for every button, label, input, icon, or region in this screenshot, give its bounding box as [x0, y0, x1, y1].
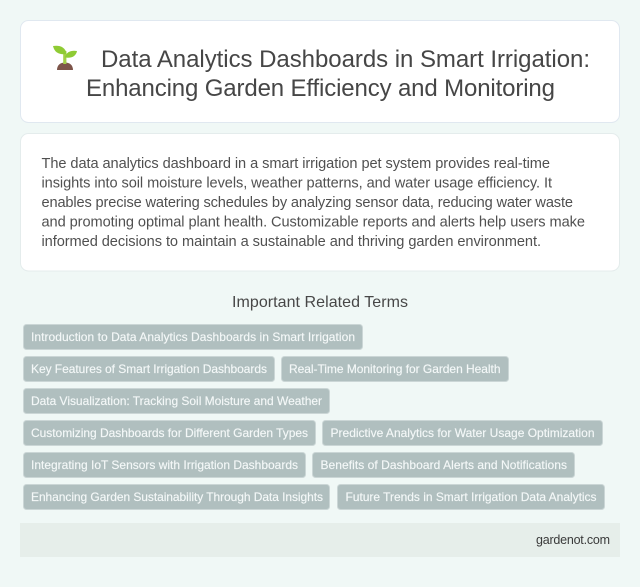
text block: description: The data analytics dashboard in a smart irrigation pet system provides real-time	[42, 156, 550, 172]
tag	[24, 420, 316, 446]
tag	[322, 420, 602, 446]
tag: Predictive Analytics for Water Usage Optimization	[330, 426, 594, 440]
tag: Key Features of Smart Irrigation Dashboards	[31, 362, 267, 376]
icon: seedling	[53, 46, 77, 70]
tag	[24, 452, 306, 478]
tag	[312, 452, 574, 478]
tag: Introduction to Data Analytics Dashboards in Smart Irrigation	[31, 330, 355, 344]
tag: Benefits of Dashboard Alerts and Notifications	[320, 458, 567, 472]
tag	[24, 356, 274, 382]
tag	[24, 484, 330, 510]
tag	[338, 484, 604, 510]
text block: description: and promoting optimal plant health. Customizable reports and alerts help users make	[42, 214, 585, 230]
panel: description card	[20, 134, 620, 271]
text block: description	[42, 156, 585, 250]
tag: Future Trends in Smart Irrigation Data Analytics	[346, 490, 596, 504]
title: Enhancing Garden Efficiency and Monitoring	[86, 75, 555, 102]
tag: Customizing Dashboards for Different Garden Types	[31, 426, 308, 440]
tag	[24, 324, 362, 350]
text block: description: informed decisions to maintain a sustainable and thriving garden environment.	[42, 234, 541, 250]
tag	[24, 388, 330, 414]
tag: Data Visualization: Tracking Soil Moisture and Weather	[31, 394, 322, 408]
text block: description: insights into soil moisture levels, weather patterns, and water usage efficiency. It	[42, 176, 552, 192]
title	[86, 46, 590, 102]
text block: description: enables precise watering schedules by analyzing sensor data, reducing water waste	[42, 195, 573, 211]
tag: Integrating IoT Sensors with Irrigation Dashboards	[31, 458, 298, 472]
footer source text: gardenot.com	[536, 533, 610, 547]
panel: header card	[20, 20, 620, 122]
panel: related terms tags	[24, 324, 604, 510]
footer	[20, 523, 620, 557]
tag: Enhancing Garden Sustainability Through Data Insights	[31, 490, 323, 504]
heading: important related terms: Important Related Terms	[232, 294, 408, 311]
tag: Real-Time Monitoring for Garden Health	[289, 362, 500, 376]
title: Data Analytics Dashboards in Smart Irrigation:	[101, 46, 590, 73]
tag	[282, 356, 508, 382]
